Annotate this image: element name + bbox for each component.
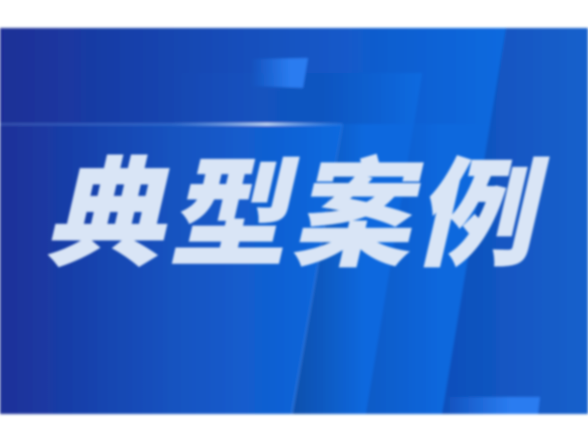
panel edge highlight (291, 124, 343, 414)
bottom accent block (444, 397, 540, 414)
second shaded strip (366, 124, 490, 414)
top accent block (251, 58, 308, 88)
front slanted panel (0, 124, 342, 414)
top glow line (0, 123, 342, 126)
shaded slanted strip (292, 124, 414, 414)
right slanted band (442, 28, 588, 414)
middle slanted panel (170, 73, 422, 124)
title: 典型案例 (39, 150, 557, 282)
